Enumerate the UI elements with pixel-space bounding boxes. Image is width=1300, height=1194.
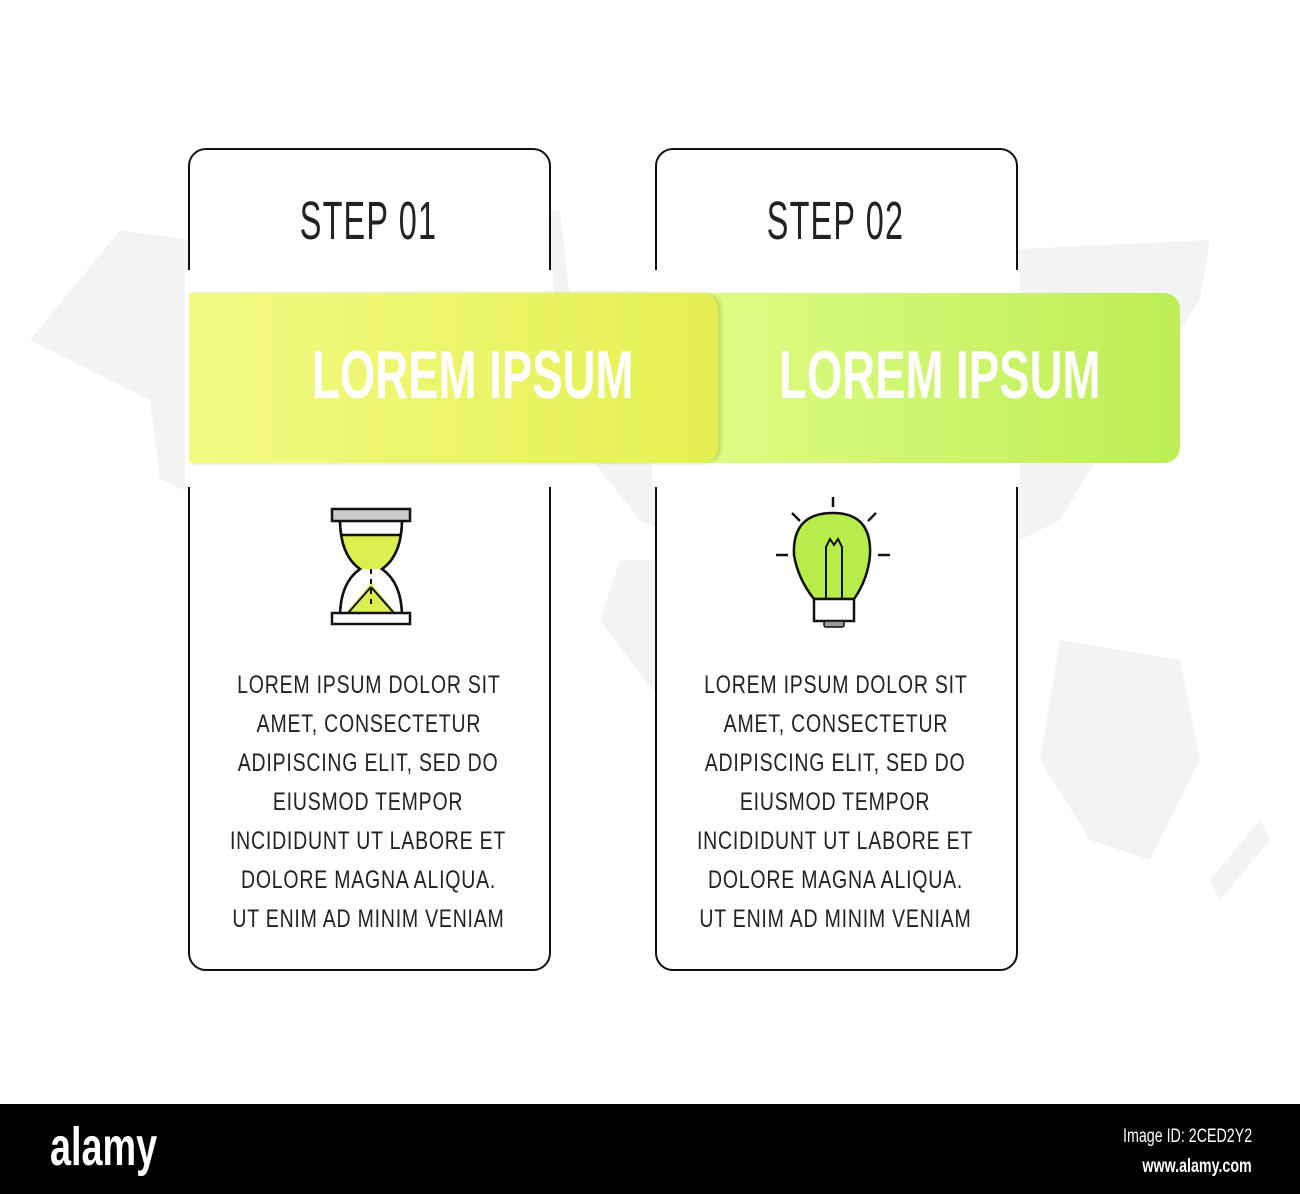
text block 1 — [230, 671, 507, 933]
icon: hourglass — [330, 508, 412, 626]
text block 2: EIUSMOD TEMPOR — [740, 788, 931, 816]
banner 1 — [189, 293, 718, 463]
text block 1: UT ENIM AD MINIM VENIAM — [232, 905, 505, 933]
heading: step 02: STEP 02 — [767, 191, 904, 251]
panel: step 02 card — [655, 148, 1018, 971]
text block 1: ADIPISCING ELIT, SED DO — [238, 749, 499, 777]
banner 2 — [690, 293, 1180, 463]
text block 1: AMET, CONSECTETUR — [256, 710, 481, 738]
text block 2: DOLORE MAGNA ALIQUA. — [708, 866, 963, 894]
banner title 2: LOREM IPSUM — [779, 337, 1100, 413]
text block 1: LOREM IPSUM DOLOR SIT — [237, 671, 500, 699]
text block 2: AMET, CONSECTETUR — [723, 710, 948, 738]
footer bar — [0, 1104, 1300, 1194]
text block 2: INCIDIDUNT UT LABORE ET — [697, 827, 974, 855]
footer info: www.alamy.com — [1143, 1156, 1252, 1177]
footer info — [1123, 1126, 1252, 1177]
footer info: Image ID: 2CED2Y2 — [1123, 1126, 1252, 1147]
panel: step 01 card — [188, 148, 551, 971]
text block 2 — [697, 671, 974, 933]
footer logo: alamy — [50, 1117, 157, 1177]
text block 2: UT ENIM AD MINIM VENIAM — [699, 905, 972, 933]
icon: light bulb — [776, 497, 890, 628]
banner title 1: LOREM IPSUM — [312, 337, 633, 413]
text block 1: DOLORE MAGNA ALIQUA. — [241, 866, 496, 894]
heading: step 01: STEP 01 — [300, 191, 437, 251]
text block 2: ADIPISCING ELIT, SED DO — [705, 749, 966, 777]
text block 1: INCIDIDUNT UT LABORE ET — [230, 827, 507, 855]
text block 2: LOREM IPSUM DOLOR SIT — [704, 671, 967, 699]
text block 1: EIUSMOD TEMPOR — [273, 788, 464, 816]
